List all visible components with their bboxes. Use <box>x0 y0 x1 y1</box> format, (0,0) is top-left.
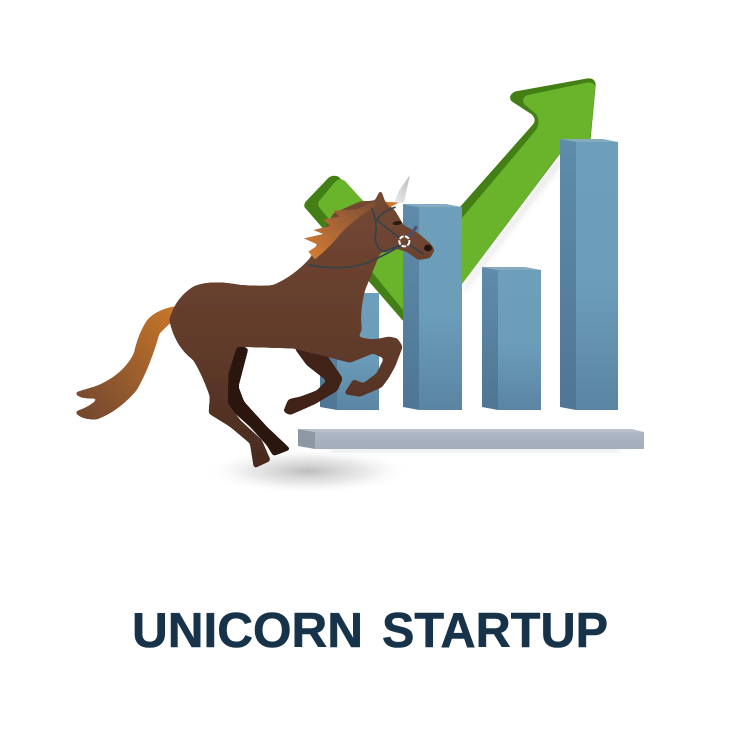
far front leg <box>283 347 343 415</box>
bar 4 <box>560 139 618 410</box>
horn <box>393 175 410 206</box>
arrow light face <box>318 83 595 310</box>
far hind leg <box>226 345 291 456</box>
platform shadow <box>330 449 620 452</box>
forelock <box>385 202 398 207</box>
platform <box>298 429 644 449</box>
title: UNICORN <box>132 604 363 658</box>
mane <box>304 201 376 259</box>
bar 2 <box>403 204 462 410</box>
arrow dark side <box>305 79 595 320</box>
green arrow <box>305 79 595 320</box>
bridle <box>308 207 423 268</box>
body <box>169 189 435 468</box>
bridle ring <box>399 236 409 246</box>
nostril <box>424 245 432 251</box>
title <box>132 604 608 658</box>
eye <box>392 220 402 226</box>
bar 1 <box>320 293 379 410</box>
ground shadow <box>203 448 413 494</box>
unicorn <box>75 175 435 468</box>
tail <box>75 306 177 419</box>
title: STARTUP <box>382 604 608 658</box>
arrow shadow <box>464 156 560 292</box>
bar 3 <box>482 267 541 410</box>
